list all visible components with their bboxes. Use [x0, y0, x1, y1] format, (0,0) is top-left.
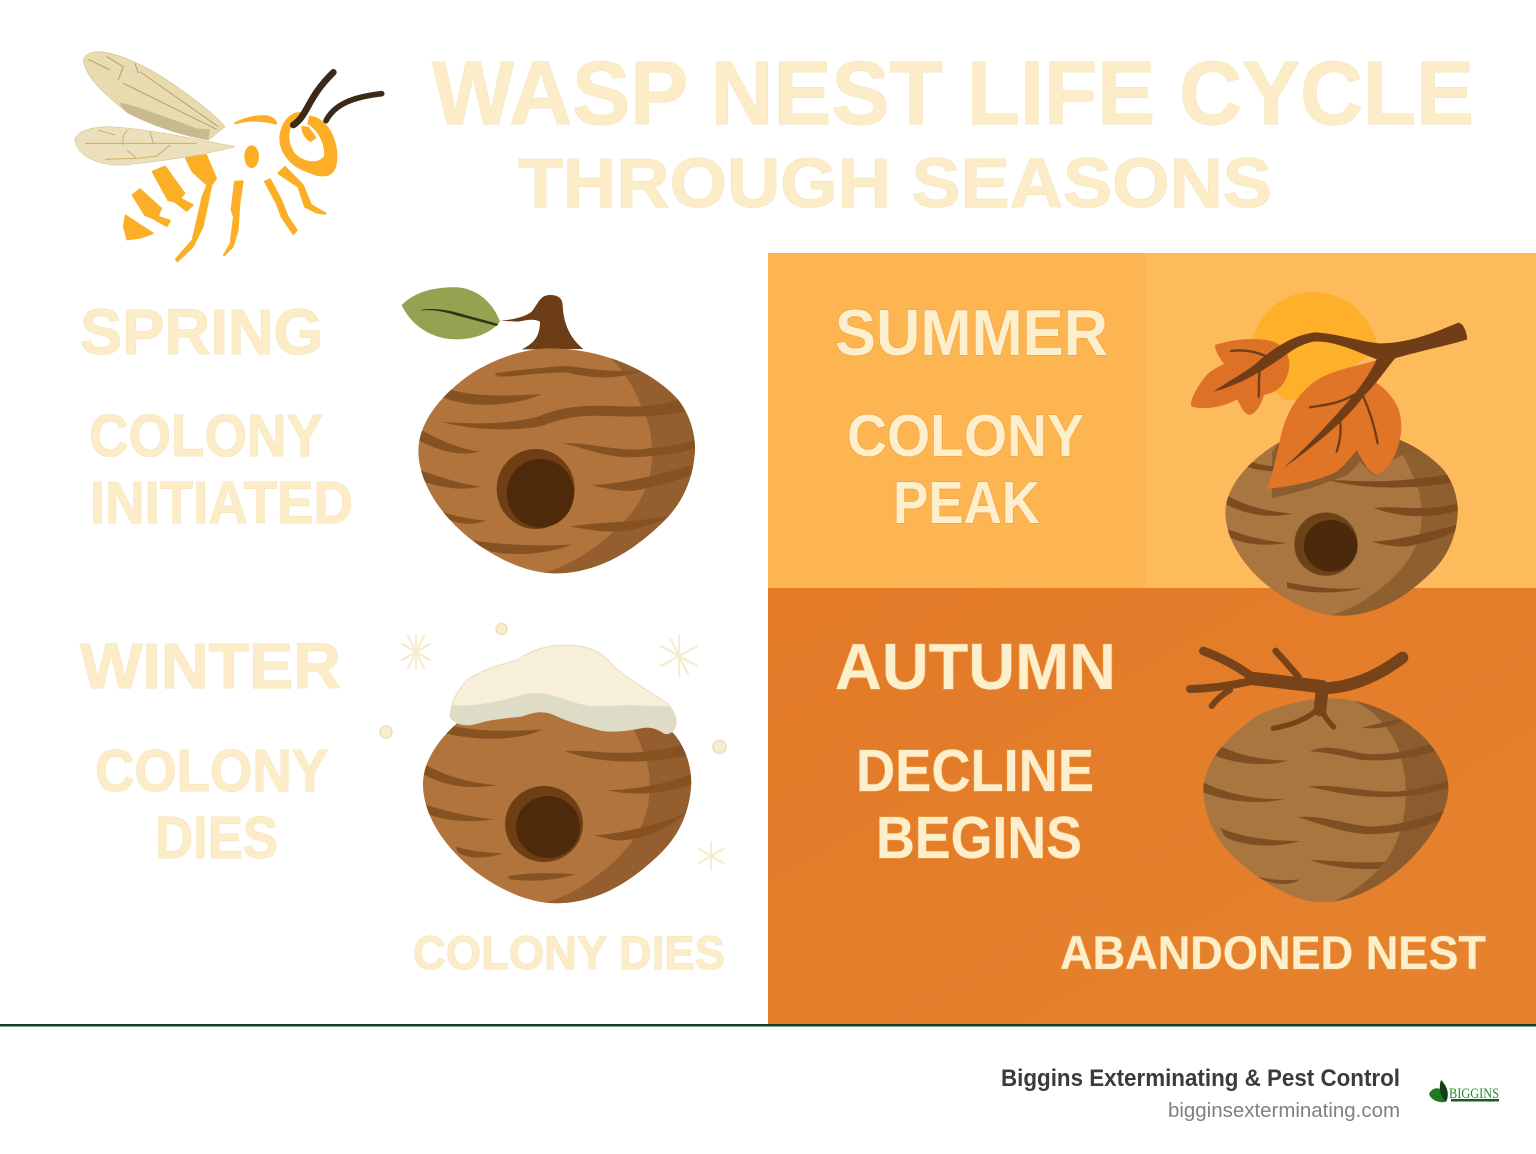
winter description: COLONY — [95, 738, 328, 804]
icon: wasp — [75, 52, 382, 261]
winter description — [95, 738, 328, 871]
icon: summer nest — [1225, 440, 1458, 616]
summer heading: SUMMER — [835, 296, 1108, 369]
icon: abandoned nest — [1190, 651, 1458, 905]
panel: autumn — [835, 630, 1486, 979]
icon: Biggins logo — [1429, 1080, 1499, 1102]
autumn description: DECLINE — [856, 738, 1094, 804]
summer description: PEAK — [893, 470, 1040, 536]
panel: summer — [835, 292, 1467, 617]
footer company name: Biggins Exterminating & Pest Control — [1001, 1065, 1400, 1092]
panel: summer background — [768, 253, 1536, 588]
autumn description: BEGINS — [876, 805, 1082, 871]
spring description: INITIATED — [90, 470, 353, 536]
spring description — [89, 403, 353, 536]
subtitle: THROUGH SEASONS — [518, 144, 1272, 222]
autumn description — [856, 738, 1094, 871]
icon: summer branch with leaves — [1191, 323, 1467, 489]
footer website: bigginsexterminating.com — [1168, 1100, 1400, 1122]
panel: spring — [80, 287, 705, 575]
spring description: COLONY — [89, 403, 323, 469]
summer description — [847, 403, 1084, 536]
icon: sun — [1253, 292, 1379, 400]
panel: autumn background — [768, 588, 1536, 1025]
icon: snowflakes — [402, 635, 723, 870]
panel: winter — [80, 624, 726, 979]
summer description: COLONY — [847, 403, 1084, 469]
icon: spring nest with leaf — [402, 287, 705, 575]
label: abandoned nest: ABANDONED NEST — [1060, 926, 1486, 979]
spring heading: SPRING — [80, 296, 323, 368]
winter description: DIES — [155, 805, 278, 871]
icon: Biggins logo: BIGGINS — [1449, 1086, 1499, 1102]
footer divider — [0, 1024, 1536, 1026]
title: WASP NEST LIFE CYCLE — [432, 44, 1474, 144]
icon: winter nest with snow — [420, 645, 701, 905]
label: colony dies: COLONY DIES — [413, 926, 725, 979]
winter heading: WINTER — [80, 630, 341, 702]
autumn heading: AUTUMN — [835, 630, 1116, 703]
icon: snow dots — [380, 624, 726, 754]
